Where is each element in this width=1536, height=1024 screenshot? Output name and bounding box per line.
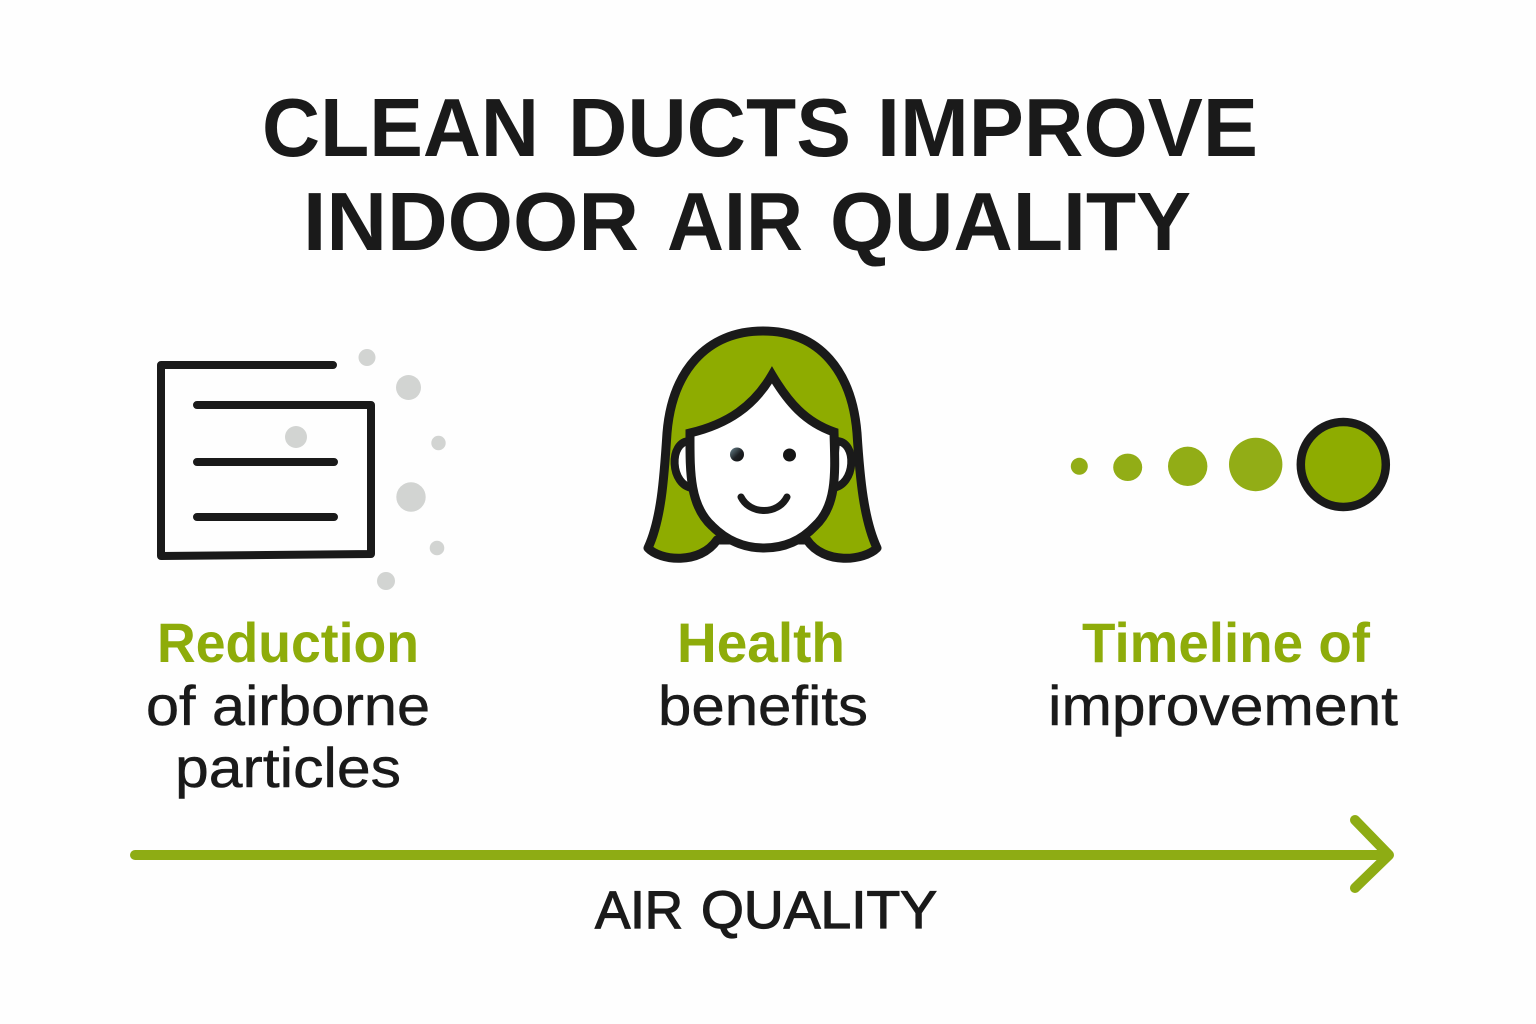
- icon: smiling person: [648, 331, 877, 558]
- label: reduction of airborne particles: of airborne: [146, 674, 430, 737]
- label: health benefits: [658, 611, 868, 737]
- label: reduction of airborne particles: Reduction: [157, 611, 419, 674]
- axis label: QUALITY: [701, 881, 937, 940]
- label: health benefits: Health: [677, 611, 845, 674]
- axis label: AIR: [595, 881, 683, 940]
- label: timeline of improvement: [1048, 611, 1398, 737]
- label: reduction of airborne particles: [146, 611, 430, 799]
- icon: growing dots timeline: [1071, 422, 1386, 507]
- title: DUCTS: [568, 81, 851, 174]
- title: CLEAN: [262, 81, 539, 174]
- label: reduction of airborne particles: particles: [175, 736, 401, 799]
- arrow: air quality axis: [135, 820, 1389, 888]
- title: [262, 81, 1258, 268]
- axis label: [595, 881, 937, 940]
- label: timeline of improvement: improvement: [1048, 674, 1398, 737]
- label: timeline of improvement: Timeline of: [1082, 611, 1370, 674]
- title: IMPROVE: [877, 81, 1258, 174]
- title: INDOOR: [303, 175, 639, 268]
- label: health benefits: benefits: [658, 674, 868, 737]
- title: AIR: [667, 175, 803, 268]
- icon: air vent with particles: [161, 349, 446, 590]
- title: QUALITY: [830, 175, 1191, 268]
